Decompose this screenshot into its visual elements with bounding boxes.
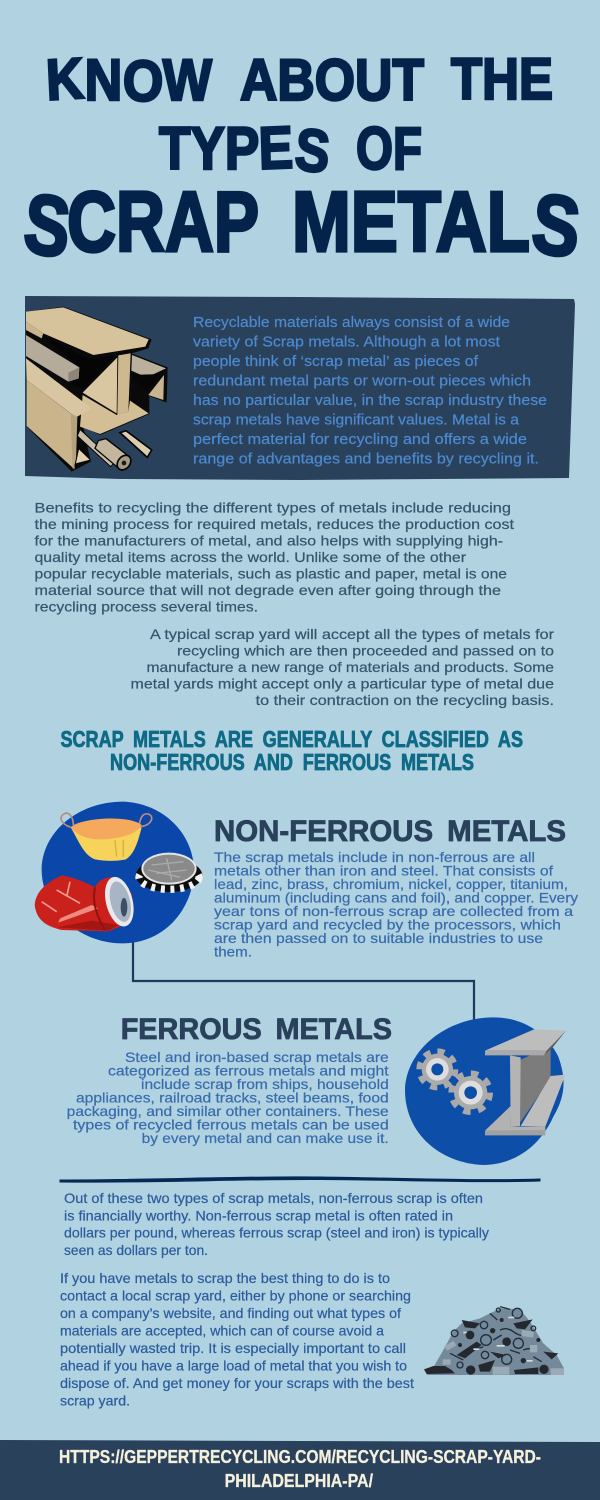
text block: benefits: material source that will not degrade even after going through the xyxy=(34,582,501,598)
text block: benefits: quality metal items across the world. Unlike some of the other xyxy=(34,549,466,565)
text block: comparison: dollars per pound, whereas ferrous scrap (steel and iron) is typically xyxy=(64,1225,489,1241)
footer url: HTTPS://GEPPERTRECYCLING.COM/RECYCLING-SCRAP-YARD- xyxy=(59,1447,541,1467)
text block: advice: ahead if you have a large load of metal that you wish to xyxy=(60,1358,407,1374)
footer url xyxy=(59,1447,541,1491)
icon: i-beam xyxy=(485,1029,566,1135)
text block: benefits xyxy=(34,500,514,614)
text block: scrap yard xyxy=(130,626,554,708)
text: ferrous description: include scrap from ships, household xyxy=(141,1076,389,1092)
text block: comparison xyxy=(64,1190,489,1258)
text block: advice: dispose of. And get money for your scraps with the best xyxy=(60,1375,414,1391)
text: ferrous description: packaging, and similar other containers. These xyxy=(67,1103,389,1119)
footer xyxy=(0,1440,600,1500)
heading: non-ferrous metals: NON-FERROUS METALS xyxy=(214,815,566,848)
heading: classification: NON-FERROUS AND FERROUS METALS xyxy=(110,749,474,775)
text: ferrous description: appliances, railroad tracks, steel beams, food xyxy=(76,1090,389,1106)
text block: advice: materials are accepted, which can of course avoid a xyxy=(60,1322,384,1338)
icon: steel beams xyxy=(26,307,168,473)
heading: ferrous metals: FERROUS METALS xyxy=(121,1013,392,1046)
text: non-ferrous description: year tons of non-ferrous scrap are collected from a xyxy=(214,903,573,919)
title: ABOUT xyxy=(240,48,424,113)
intro text: redundant metal parts or worn-out pieces which xyxy=(193,374,531,390)
text block: advice: potentially wasted trip. It is especially important to call xyxy=(60,1340,406,1356)
text block: benefits: recycling process several times. xyxy=(34,598,258,614)
text: non-ferrous description: metals other than iron and steel. That consists of xyxy=(214,862,553,878)
panel: introduction xyxy=(25,296,575,480)
title: METALS xyxy=(292,175,586,276)
text block: advice: contact a local scrap yard, either by phone or searching xyxy=(60,1288,411,1304)
intro text: perfect material for recycling and offers a wide xyxy=(193,432,527,448)
text block: scrap yard: to their contraction on the recycling basis. xyxy=(256,692,554,708)
intro text: people think of ‘scrap metal’ as pieces of xyxy=(193,354,479,370)
heading: classification xyxy=(60,726,523,775)
text: non-ferrous description: are then passed on to suitable industries to use xyxy=(214,930,543,946)
tubes xyxy=(77,429,152,473)
icon: bowl xyxy=(61,813,152,861)
icon: scrap heap xyxy=(424,1307,564,1375)
title: THE xyxy=(451,47,553,112)
text block: advice xyxy=(60,1270,414,1408)
intro text: Recyclable materials always consist of a wide xyxy=(193,315,510,331)
text block: scrap yard: manufacture a new range of materials and products. Some xyxy=(146,659,554,675)
icon: gears xyxy=(420,1052,490,1112)
text: non-ferrous description xyxy=(214,849,578,960)
text: non-ferrous description: them. xyxy=(214,944,252,960)
intro text: variety of Scrap metals. Although a lot most xyxy=(193,334,500,350)
text: non-ferrous description: The scrap metals include in non-ferrous are all xyxy=(214,849,535,865)
text: ferrous description: categorized as ferrous metals and might xyxy=(108,1062,389,1078)
text block: scrap yard: recycling which are then proceeded and passed on to xyxy=(177,642,554,658)
intro text: scrap metals have significant values. Metal is a xyxy=(193,412,520,428)
text block: scrap yard: A typical scrap yard will accept all the types of metals for xyxy=(150,626,554,642)
text block: advice: If you have metals to scrap the best thing to do is to xyxy=(60,1270,390,1286)
text block: comparison: is financially worthy. Non-ferrous scrap metal is often rated in xyxy=(64,1207,453,1223)
icon: non-ferrous metals xyxy=(35,802,202,943)
icon: ferrous metals xyxy=(405,1017,566,1165)
text: ferrous description: by every metal and can make use it. xyxy=(142,1130,389,1146)
title: TYPES xyxy=(159,114,333,186)
text block: benefits: popular recyclable materials, such as plastic and paper, metal is one xyxy=(34,566,507,582)
divider line xyxy=(60,1177,540,1182)
intro text: range of advantages and benefits by recycling it. xyxy=(193,452,539,468)
icon: bottle cap xyxy=(136,853,202,892)
intro text: has no particular value, in the scrap industry these xyxy=(193,393,547,409)
text: non-ferrous description: lead, zinc, brass, chromium, nickel, copper, titanium, xyxy=(214,876,568,892)
text: non-ferrous description: aluminum (including cans and foil), and copper. Every xyxy=(214,890,578,906)
section: non-ferrous metals xyxy=(214,815,578,960)
text block: benefits: for the manufacturers of metal, and also helps with supplying high- xyxy=(34,532,503,548)
icon: crushed can xyxy=(35,874,138,931)
text: ferrous description xyxy=(67,1049,389,1146)
text block: benefits: Benefits to recycling the different types of metals include reducing xyxy=(34,500,511,516)
text block: comparison: Out of these two types of scrap metals, non-ferrous scrap is often xyxy=(64,1190,483,1206)
text block: advice: scrap yard. xyxy=(60,1392,130,1408)
text: ferrous description: types of recycled ferrous metals can be used xyxy=(73,1116,389,1132)
text: non-ferrous description: scrap yard and recycled by the processors, which xyxy=(214,916,561,932)
footer url: PHILADELPHIA-PA/ xyxy=(225,1471,373,1491)
connector line xyxy=(133,940,474,1020)
title: SCRAP xyxy=(20,175,259,275)
text: ferrous description: Steel and iron-based scrap metals are xyxy=(125,1049,389,1065)
text block: comparison: seen as dollars per ton. xyxy=(64,1242,208,1258)
title: OF xyxy=(356,115,422,182)
section: ferrous metals xyxy=(67,1013,392,1146)
title xyxy=(20,46,586,276)
text block: advice: on a company’s website, and finding out what types of xyxy=(60,1305,401,1321)
intro text xyxy=(193,315,547,468)
title: KNOW xyxy=(44,46,212,114)
text block: benefits: the mining process for required metals, reduces the production cost xyxy=(34,516,514,532)
text block: scrap yard: metal yards might accept only a particular type of metal due xyxy=(130,676,554,692)
